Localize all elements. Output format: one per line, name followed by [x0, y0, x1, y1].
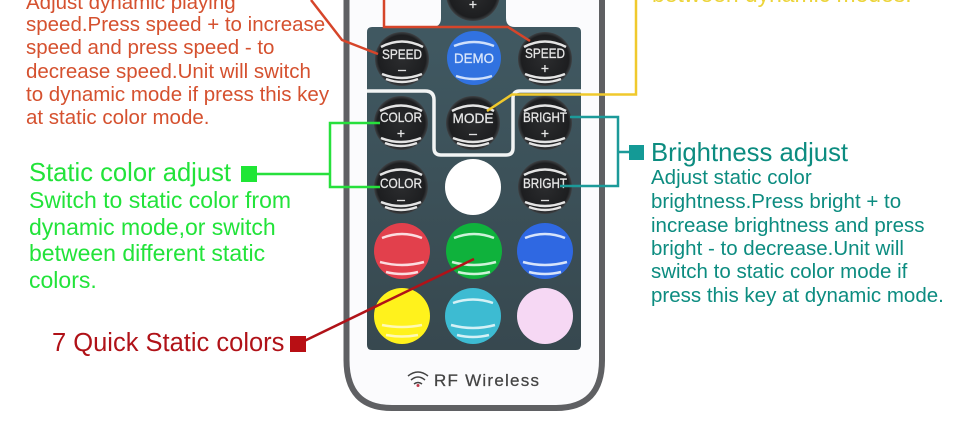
- static color heading: Static color adjust: [29, 159, 231, 187]
- button: pink: [517, 288, 573, 344]
- button: color plus: [374, 96, 428, 150]
- button: bright minus: BRIGHT: [523, 175, 567, 191]
- brightness description: bright - to decrease.Unit will: [651, 237, 904, 260]
- static color description: colors.: [29, 267, 97, 293]
- button: yellow: [374, 288, 430, 344]
- button: color minus: –: [397, 191, 405, 207]
- button: green: [446, 223, 502, 279]
- green marker: [241, 166, 257, 182]
- button: speed minus: –: [398, 61, 406, 77]
- button: color plus: +: [397, 125, 405, 141]
- brightness description: press this key at dynamic mode.: [651, 284, 944, 307]
- button: demo: DEMO: [454, 50, 494, 66]
- brightness description: increase brightness and press: [651, 214, 924, 237]
- remote body: [346, 0, 602, 408]
- red marker: [290, 336, 306, 352]
- icon: wifi: [408, 372, 428, 387]
- button: demo: [447, 31, 501, 85]
- button: white: [445, 159, 501, 215]
- button: color plus: COLOR: [380, 109, 422, 125]
- speed description: decrease speed.Unit will switch: [26, 60, 311, 83]
- button: bright plus: BRIGHT: [523, 109, 567, 125]
- button: mode: [446, 96, 500, 150]
- mode connector line: [487, 0, 636, 111]
- button: speed minus: [375, 32, 429, 86]
- teal marker: [629, 145, 644, 160]
- brightness description: brightness.Press bright + to: [651, 190, 901, 213]
- button: bright minus: –: [541, 191, 549, 207]
- top button: [446, 0, 500, 21]
- button: speed minus: SPEED: [382, 46, 422, 62]
- button: red: [374, 223, 430, 279]
- brightness description: switch to static color mode if: [651, 260, 908, 283]
- button: speed plus: +: [541, 60, 549, 76]
- button: cyan: [445, 288, 501, 344]
- button: speed plus: SPEED: [525, 45, 565, 61]
- button: color minus: [374, 160, 428, 214]
- quick colors heading: 7 Quick Static colors: [52, 329, 284, 357]
- RF Wireless label: RF Wireless: [434, 371, 539, 390]
- button: mode: MODE: [452, 110, 494, 126]
- remote control: [346, 0, 602, 408]
- speed description: at static color mode.: [26, 106, 209, 129]
- button: mode: –: [469, 125, 477, 141]
- static color description: between different static: [29, 240, 265, 266]
- button: speed plus: [518, 32, 572, 86]
- button: bright plus: +: [541, 125, 549, 141]
- brightness description: Adjust static color: [651, 166, 812, 189]
- button: bright minus: [518, 160, 572, 214]
- brightness heading: Brightness adjust: [651, 139, 848, 167]
- speed description: speed and press speed - to: [26, 36, 274, 59]
- quick colors connector: [290, 259, 474, 352]
- button: bright plus: [518, 96, 572, 150]
- color connector: [241, 123, 380, 187]
- button: color minus: COLOR: [380, 175, 422, 191]
- button panel: [367, 0, 581, 350]
- speed description: speed.Press speed + to increase: [26, 13, 325, 36]
- panel divider: [367, 91, 581, 155]
- speed description: to dynamic mode if press this key: [26, 83, 330, 106]
- button: blue: [517, 223, 573, 279]
- brightness connector: [560, 117, 644, 186]
- speed connector lines: [311, 0, 530, 54]
- static color description: dynamic mode,or switch: [29, 214, 276, 240]
- static color description: Switch to static color from: [29, 187, 291, 213]
